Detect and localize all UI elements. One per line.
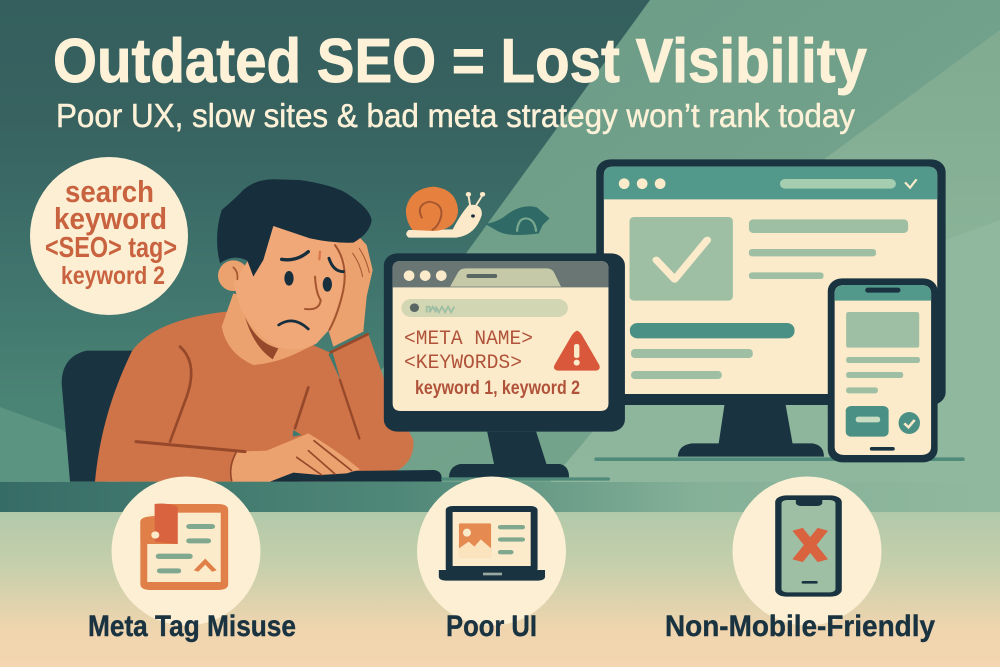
snail shell	[406, 187, 458, 231]
callout: keyword bubble: <SEO> tag>	[45, 232, 177, 264]
category: non-mobile-friendly	[732, 476, 882, 626]
stand	[449, 432, 569, 477]
gap between arm and body	[328, 353, 341, 381]
sweater and hand lines	[136, 334, 368, 481]
facial features	[233, 245, 369, 330]
browser tab	[450, 268, 561, 287]
browser bar	[393, 261, 608, 287]
icon: laptop	[446, 506, 538, 573]
illustration: phone	[828, 278, 938, 462]
text lines	[631, 219, 908, 379]
chair	[62, 351, 133, 482]
code text	[404, 328, 580, 399]
icon: phone with x	[775, 495, 842, 597]
callout: keyword bubble: keyword	[54, 201, 167, 236]
illustration: snail	[406, 187, 485, 238]
label: poor UI: Poor UI	[446, 610, 537, 643]
callout: keyword bubble: search	[65, 174, 154, 209]
sweater	[95, 312, 413, 482]
illustration: outdated monitor	[384, 253, 625, 481]
label: meta tag misuse: Meta Tag Misuse	[88, 610, 296, 643]
hand on head	[328, 236, 373, 347]
neck shadow	[245, 317, 278, 359]
category: meta tag misuse	[112, 476, 260, 626]
screen	[604, 167, 937, 394]
code text: <KEYWORDS>	[404, 352, 522, 375]
snail body	[406, 205, 482, 238]
illustration: frustrated person at desk	[62, 179, 442, 482]
screen	[393, 261, 608, 411]
code text: keyword 1, keyword 2	[415, 378, 580, 399]
image placeholder	[459, 523, 491, 557]
floor line	[441, 477, 610, 481]
title: Outdated SEO = Lost Visibility	[53, 27, 867, 96]
stand	[678, 405, 824, 457]
lower hand	[231, 433, 360, 482]
address bar	[401, 299, 568, 317]
category: poor UI	[417, 476, 566, 626]
frame	[596, 159, 946, 405]
keyboard	[270, 470, 442, 482]
floor line	[594, 457, 965, 461]
neck and jaw	[222, 293, 317, 365]
illustration: snail shadow	[485, 206, 550, 235]
frame	[384, 253, 625, 432]
label: non-mobile-friendly: Non-Mobile-Friendly	[665, 610, 935, 643]
callout: keyword bubble	[30, 157, 188, 315]
illustration: modern desktop monitor	[594, 159, 965, 461]
callout: keyword bubble: keyword 2	[61, 262, 165, 290]
subtitle: Poor UX, slow sites & bad meta strategy won’t rank today	[56, 97, 855, 134]
hair	[217, 179, 372, 277]
code text: <META NAME>	[404, 328, 533, 351]
header bar	[604, 167, 937, 199]
image placeholder with check	[630, 217, 733, 301]
ear	[218, 260, 249, 291]
warning triangle	[554, 331, 600, 371]
icon: document	[140, 504, 228, 590]
face	[233, 225, 350, 349]
